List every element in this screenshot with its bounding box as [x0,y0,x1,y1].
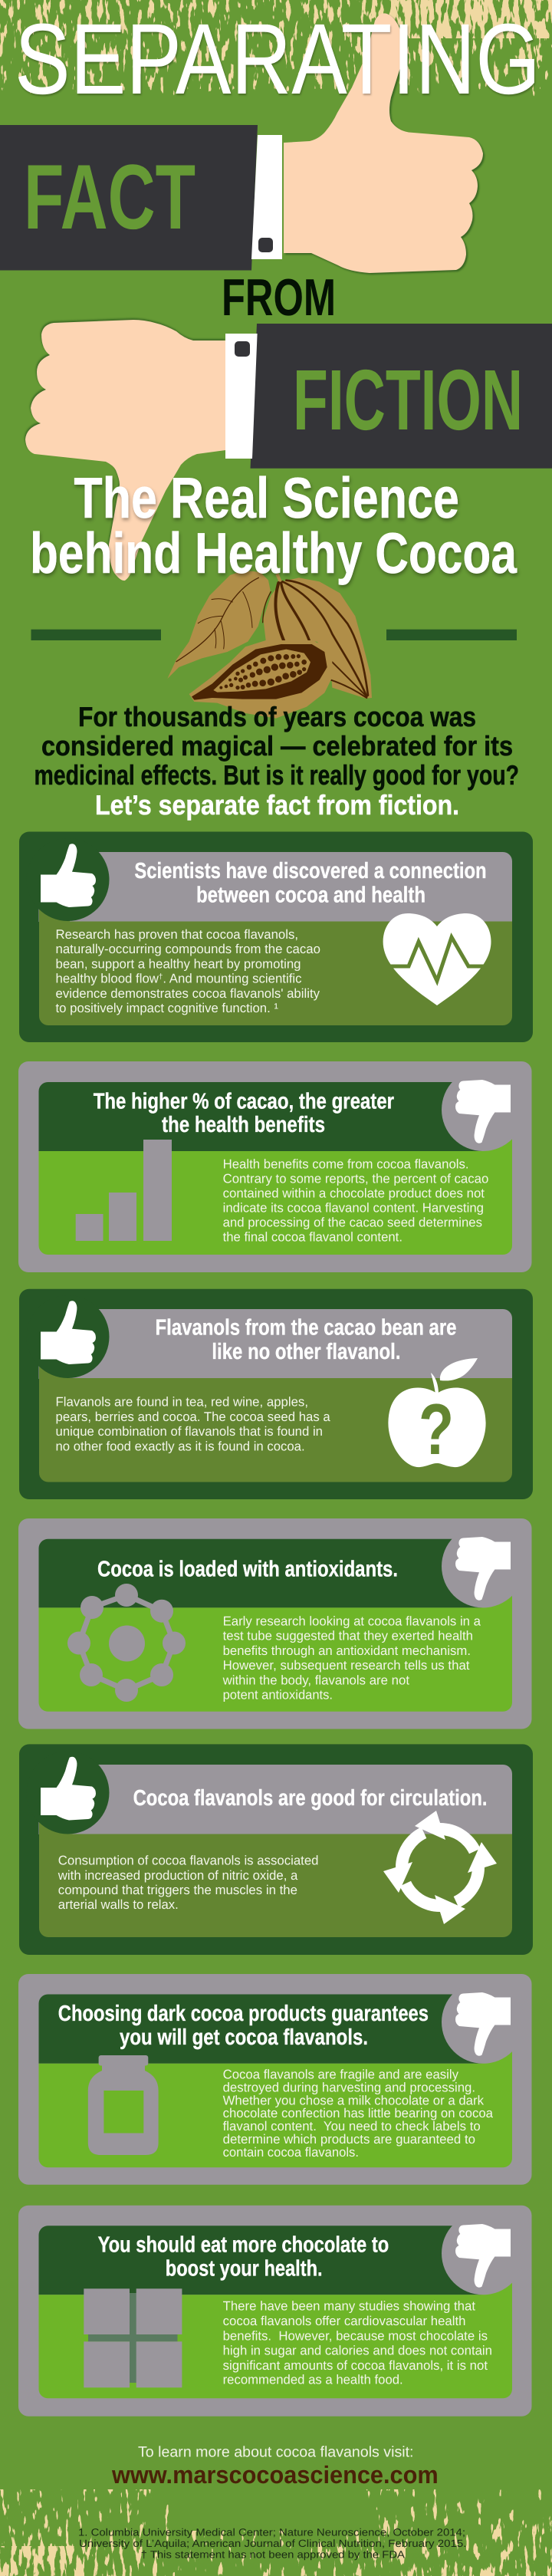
references [78,2527,466,2561]
icon: circular arrows [383,1811,497,1924]
body text: arterial walls to relax. [58,1897,179,1912]
icon: heart with pulse [383,913,491,1005]
heading [58,2002,429,2050]
word: FACT: FACT [24,146,196,248]
subtitle [30,466,518,585]
icon: molecule [67,1584,186,1702]
body text: recommended as a health food. [223,2373,403,2387]
body text: indicate its cocoa flavanol content. Harvesting [223,1200,484,1215]
intro text: For thousands of years cocoa was [78,701,476,732]
body text: Cocoa flavanols are fragile and are easily [223,2068,458,2082]
panel: fact 1 connection [19,831,533,1042]
body text [223,2068,494,2160]
heading: Cocoa is loaded with antioxidants. [97,1558,398,1582]
heading: the health benefits [162,1113,325,1137]
heading: You should eat more chocolate to [98,2233,389,2258]
body text: Consumption of cocoa flavanols is associated [58,1853,319,1867]
body text: test tube suggested that they exerted health [223,1629,473,1643]
body text [223,2299,492,2387]
body text: benefits through an antioxidant mechanism. [223,1643,471,1658]
body text: potent antioxidants. [223,1688,333,1703]
body text: within the body, flavanols are not [222,1673,409,1687]
body text: and processing of the cacao seed determines [223,1216,482,1230]
intro text: Let’s separate fact from fiction. [95,789,459,821]
panel: fact 3 circulation [19,1744,533,1955]
body text: unique combination of flavanols that is found in [55,1424,323,1439]
divider right [386,630,517,640]
icon: thumbs up [41,844,96,907]
icon: thumbs down [455,1537,511,1601]
heading: boost your health. [166,2257,323,2282]
body text: benefits. However, because most chocolate is [223,2328,488,2343]
texture: top grunge [0,0,552,98]
intro text [34,701,519,821]
panel: fiction 4 eat more chocolate [18,2206,532,2416]
body text: to positively impact cognitive function. ¹ [55,1001,278,1015]
heading: Scientists have discovered a connection [134,859,487,883]
icon: thumbs up [41,1757,96,1821]
bar chart icon [76,1140,172,1241]
body text: determine which products are guaranteed to [223,2132,475,2147]
heading: you will get cocoa flavanols. [120,2025,368,2050]
body text: compound that triggers the muscles in the [58,1883,297,1897]
body text: high in sugar and calories and does not contain [223,2344,492,2358]
body text: the final cocoa flavanol content. [223,1230,402,1245]
body text: destroyed during harvesting and processing. [223,2081,475,2095]
word: FROM: FROM [222,268,336,327]
illustration: thumbs down hand [25,320,552,581]
heading: Flavanols from the cacao bean are [155,1316,457,1341]
body text: Early research looking at cocoa flavanols in a [223,1614,481,1628]
heading [94,1089,394,1137]
body text [58,1853,318,1912]
body text [55,927,320,1015]
body text: contain cocoa flavanols. [223,2145,359,2160]
references: † This statement has not been approved by the FDA [141,2549,405,2561]
texture: bottom grunge [0,2489,552,2576]
references: University of L’Aquila; American Journal of Clinical Nutrition, February 2015. [79,2538,466,2549]
body text: pears, berries and cocoa. The cocoa seed has a [55,1410,330,1424]
body text: significant amounts of cocoa flavanols, it is not [223,2358,488,2373]
body text: cocoa flavanols offer cardiovascular health [223,2314,466,2328]
footer call to action: To learn more about cocoa flavanols visit: [138,2443,414,2460]
icon: chocolate bar [84,2288,182,2387]
panel: fiction 1 cacao percent [18,1061,532,1272]
icon: thumbs down [455,1992,511,2056]
heading: Cocoa flavanols are good for circulation. [133,1786,488,1811]
body text: bean, support a healthy heart by promoting [55,957,301,971]
icon: thumbs up [41,1301,96,1364]
body text: Research has proven that cocoa flavanols, [55,927,298,942]
heading [134,859,487,908]
heading: between cocoa and health [196,883,426,908]
heading [155,1316,457,1364]
body text: contained within a chocolate product does not [223,1186,485,1200]
footer url: www.marscocoascience.com [111,2461,439,2489]
panel: fact 2 flavanols [19,1289,533,1499]
icon: thumbs down [455,2224,511,2288]
intro text: considered magical — celebrated for its [41,730,513,762]
heading: Choosing dark cocoa products guarantees [58,2002,429,2026]
icon: jar [88,2055,159,2155]
body text [223,1156,488,1245]
body text: healthy blood flow [55,971,160,985]
body text: no other food exactly as it is found in cocoa. [55,1439,305,1453]
body text: Whether you chose a milk chocolate or a dark [223,2093,484,2107]
body text: naturally-occurring compounds from the cacao [55,942,320,956]
icon: apple with question mark [388,1358,486,1469]
icon: thumbs down [455,1080,511,1143]
body text: However, subsequent research tells us that [223,1658,470,1673]
body text: Flavanols are found in tea, red wine, apples, [55,1395,308,1410]
body text: . And mounting scientific [163,971,302,985]
panel: fiction 2 antioxidants [18,1518,532,1729]
illustration: cocoa pod and leaf [167,571,372,719]
subtitle: The Real Science [74,466,459,530]
body text [222,1614,481,1703]
heading [98,2233,389,2282]
body text: evidence demonstrates cocoa flavanols' ability [55,986,320,1001]
body text: with increased production of nitric oxide, a [58,1868,298,1883]
body text: Health benefits come from cocoa flavanols. [223,1156,469,1171]
divider left [31,630,161,640]
panel: fiction 3 dark cocoa [18,1974,532,2185]
heading: The higher % of cacao, the greater [94,1089,394,1114]
body text: chocolate confection has little bearing on cocoa [223,2106,494,2120]
body text: † [159,972,163,981]
body text: flavanol content. You need to check labels to [223,2119,481,2134]
body text: Contrary to some reports, the percent of cacao [223,1171,488,1186]
illustration: thumbs up hand [0,13,483,273]
icon: apple with question mark: ? [419,1389,454,1469]
heading: like no other flavanol. [212,1340,400,1364]
body text [55,1395,330,1453]
body text: There have been many studies showing that [223,2299,475,2314]
references: 1. Columbia University Medical Center; Nature Neuroscience, October 2014; [78,2527,465,2538]
